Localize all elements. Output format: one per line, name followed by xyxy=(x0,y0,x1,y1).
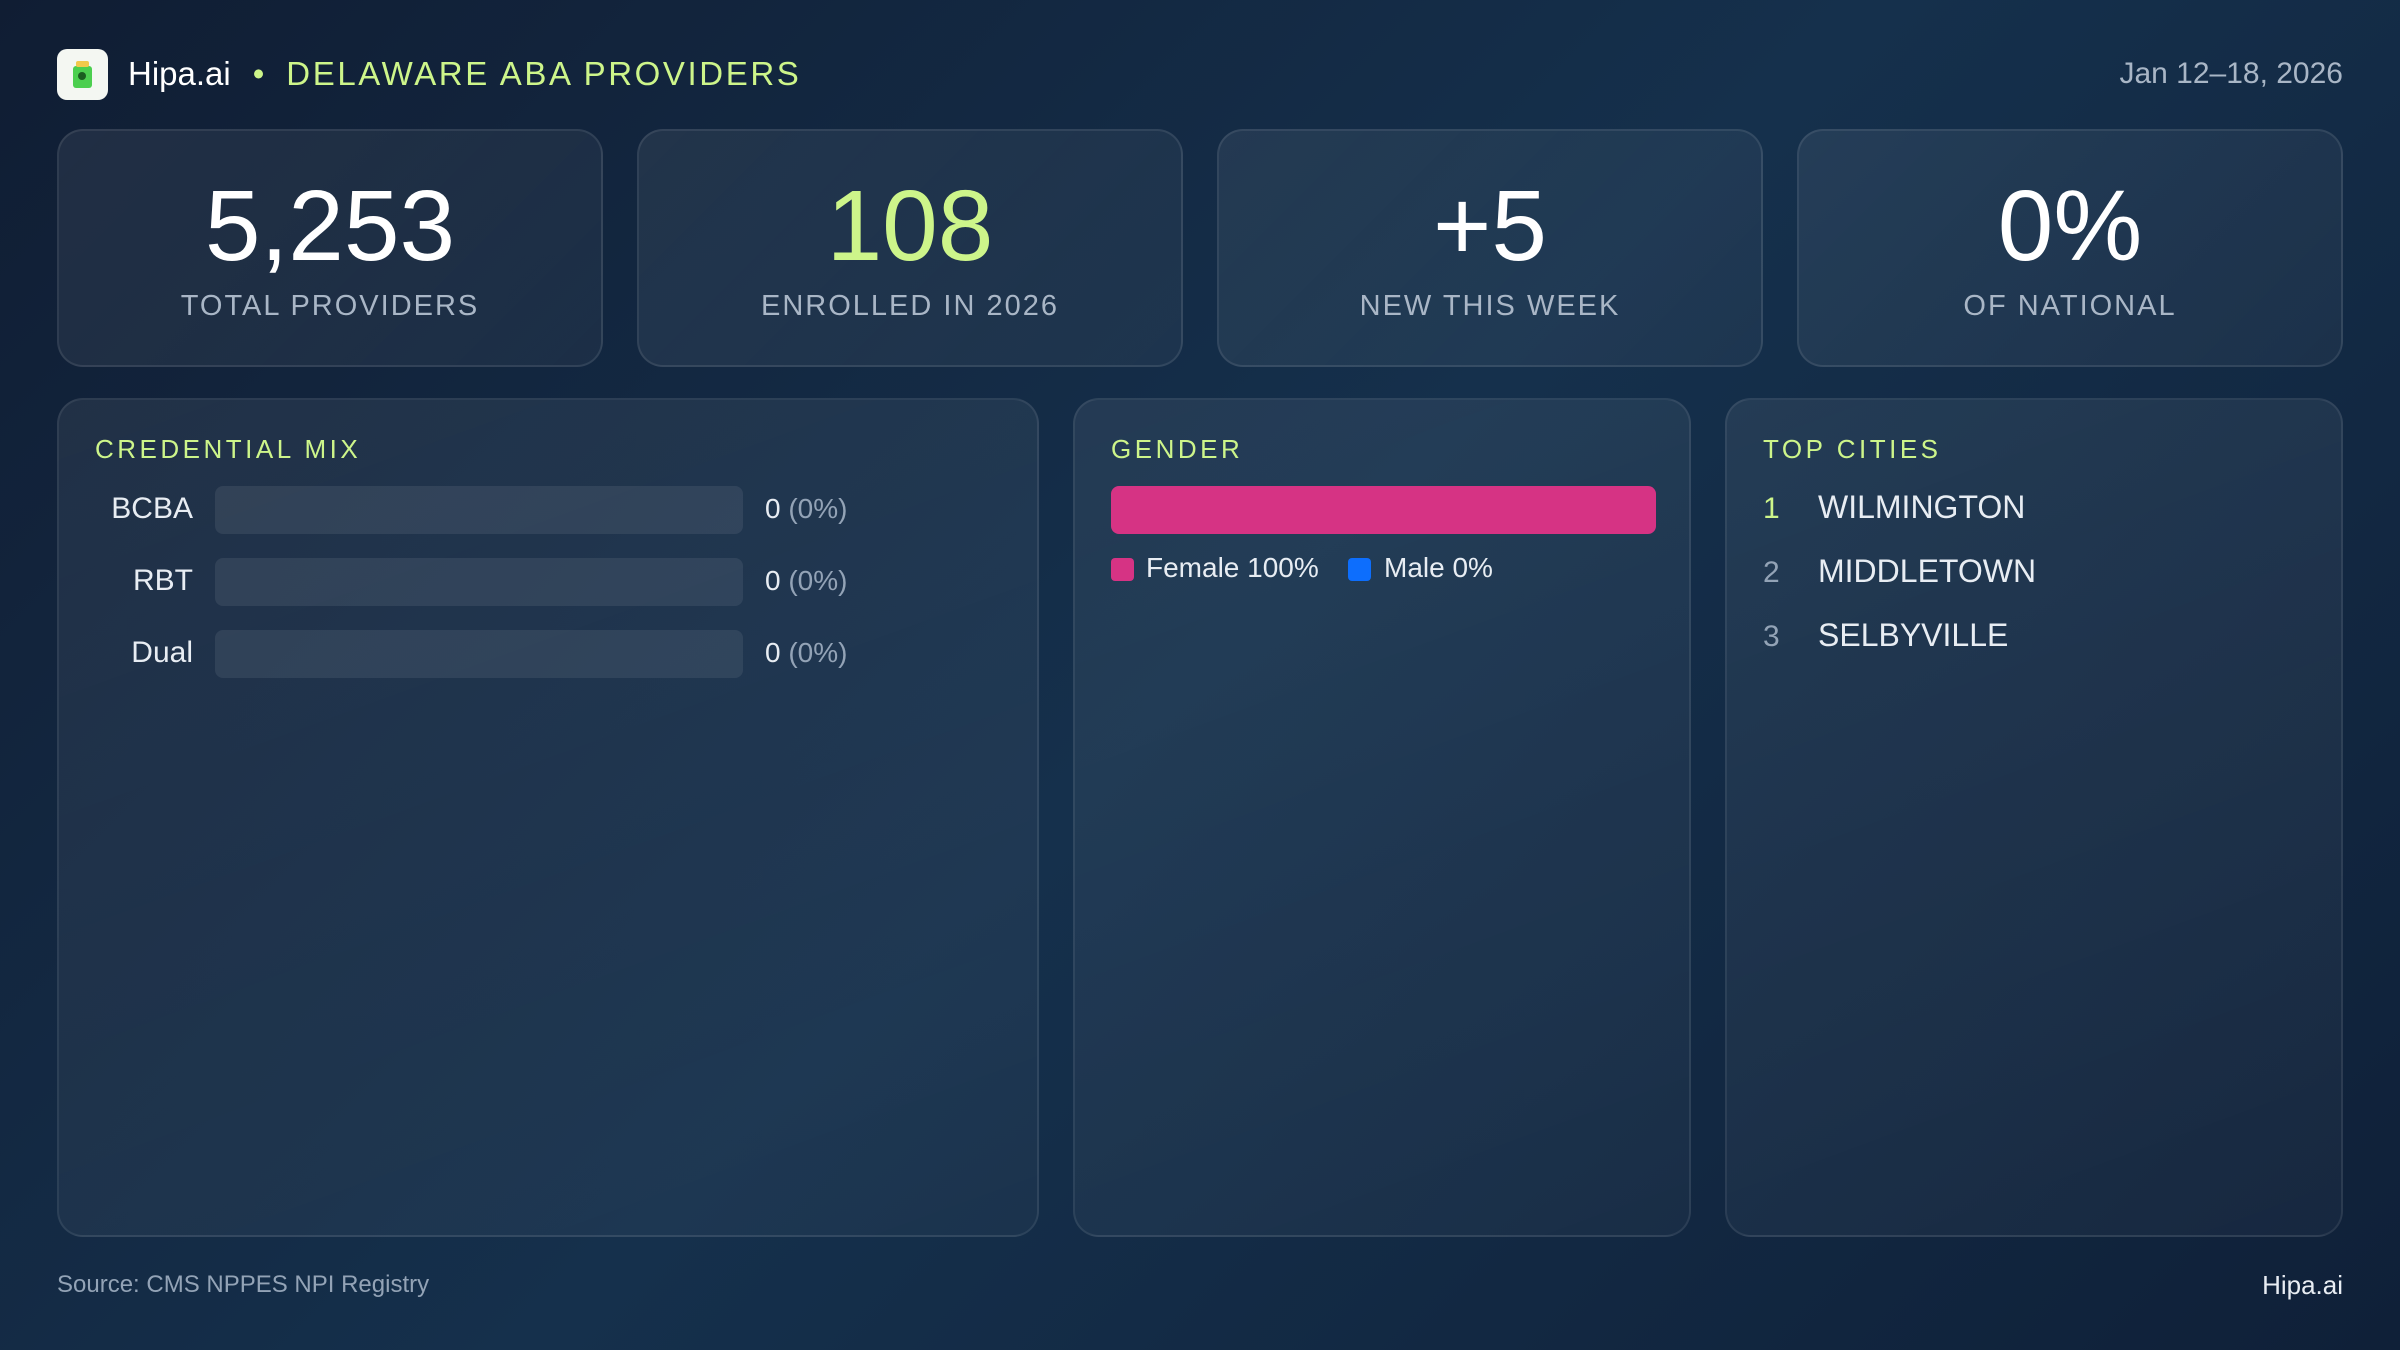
header xyxy=(57,49,2343,100)
bar row: Dual xyxy=(131,630,847,678)
icon: logo xyxy=(57,49,108,100)
date: Jan 12–18, 2026 xyxy=(2119,57,2343,90)
kpi: enrolled: 108 xyxy=(827,170,993,282)
gender bar xyxy=(1111,486,1656,534)
city list: MIDDLETOWN xyxy=(1818,553,2036,589)
kpi: new this week: NEW THIS WEEK xyxy=(1360,290,1620,322)
kpi: total providers xyxy=(57,129,603,367)
footer: source: Source: CMS NPPES NPI Registry xyxy=(57,1271,429,1298)
bar row: RBT xyxy=(133,558,847,606)
legend: Female 100% xyxy=(1146,552,1319,583)
kpi: enrolled xyxy=(637,129,1183,367)
panel: gender xyxy=(1073,398,1691,1237)
city list: 2 xyxy=(1763,556,1780,589)
bar row: BCBA: BCBA xyxy=(111,492,193,525)
legend: Male 0% xyxy=(1384,552,1493,583)
city list xyxy=(1763,489,2036,653)
panel: top cities xyxy=(1725,398,2343,1237)
kpi: of national xyxy=(1797,129,2343,367)
footer: brand: Hipa.ai xyxy=(2262,1270,2343,1300)
panel: credential mix xyxy=(57,398,1039,1237)
brand and title: Hipa.ai • DELAWARE ABA PROVIDERS xyxy=(128,55,801,92)
kpi: new this week: +5 xyxy=(1433,170,1547,282)
city list: WILMINGTON xyxy=(1818,489,2025,525)
kpi: of national: OF NATIONAL xyxy=(1963,290,2177,322)
kpi: new this week xyxy=(1217,129,1763,367)
heading: credential mix: CREDENTIAL MIX xyxy=(95,434,361,464)
bar row: BCBA: 0 (0%) xyxy=(765,493,847,524)
city list: 3 xyxy=(1763,620,1780,653)
kpi: of national: 0% xyxy=(1998,170,2142,282)
bar row: RBT: RBT xyxy=(133,564,193,597)
bar row: Dual: Dual xyxy=(131,636,193,669)
bar row: Dual: 0 (0%) xyxy=(765,637,847,668)
heading: gender: GENDER xyxy=(1111,434,1243,464)
kpi: enrolled: ENROLLED IN 2026 xyxy=(761,290,1059,322)
kpi: total providers: TOTAL PROVIDERS xyxy=(181,290,479,322)
heading: top cities: TOP CITIES xyxy=(1763,434,1942,464)
legend xyxy=(1111,552,1493,583)
city list: 1 xyxy=(1763,492,1780,525)
city list: SELBYVILLE xyxy=(1818,617,2008,653)
kpi: total providers: 5,253 xyxy=(205,170,455,282)
bar row: RBT: 0 (0%) xyxy=(765,565,847,596)
bar row: BCBA xyxy=(111,486,847,534)
